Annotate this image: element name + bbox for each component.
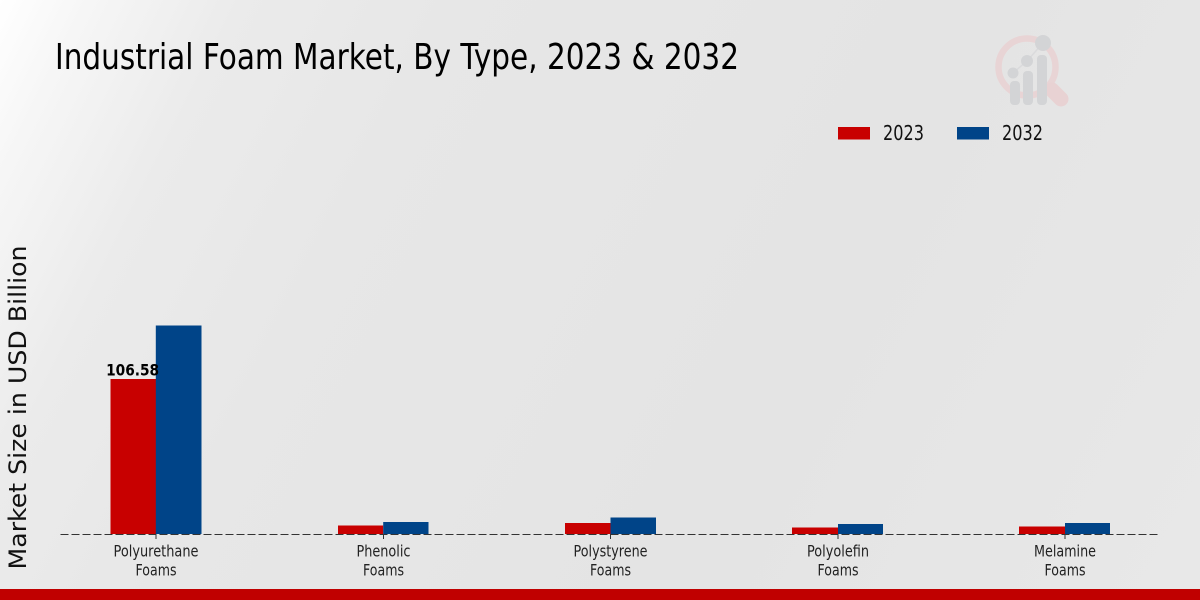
group: Polyurethane Foams: 106.58: [106, 360, 159, 379]
x-axis baseline: [60, 534, 1159, 539]
group: Polyurethane Foams: Foams: [136, 561, 176, 580]
y-axis label: Market Size in USD Billion: [4, 246, 32, 570]
group: Polystyrene Foams: Polystyrene: [574, 542, 648, 561]
group: Polyurethane Foams: [106, 326, 202, 580]
group: Phenolic Foams: [338, 522, 428, 580]
group: Phenolic Foams: Phenolic: [356, 542, 410, 561]
group: Polyolefin Foams: [792, 524, 883, 580]
group: Melamine Foams: Melamine: [1034, 542, 1096, 561]
group: Melamine Foams: [1019, 523, 1110, 580]
footer bar: [0, 589, 1200, 600]
legend item: 2032: 2032: [1002, 121, 1043, 145]
legend item: 2023: 2023: [883, 121, 924, 145]
group: Polyurethane Foams: Polyurethane: [114, 542, 198, 561]
group: Polystyrene Foams: Foams: [590, 561, 631, 580]
group: Polystyrene Foams: [565, 518, 656, 580]
legend item: 2032: [957, 121, 1043, 145]
group: Polyolefin Foams: Polyolefin: [807, 542, 869, 561]
legend: [838, 121, 1043, 145]
group: Phenolic Foams: Foams: [363, 561, 404, 580]
bar chart: [60, 326, 1159, 580]
group: Melamine Foams: Foams: [1044, 561, 1086, 580]
title: Industrial Foam Market, By Type, 2023 & 2032: [55, 37, 739, 78]
legend item: 2023: [838, 121, 924, 145]
group: Polyolefin Foams: Foams: [818, 561, 858, 580]
icon: watermark logo: [998, 35, 1061, 105]
